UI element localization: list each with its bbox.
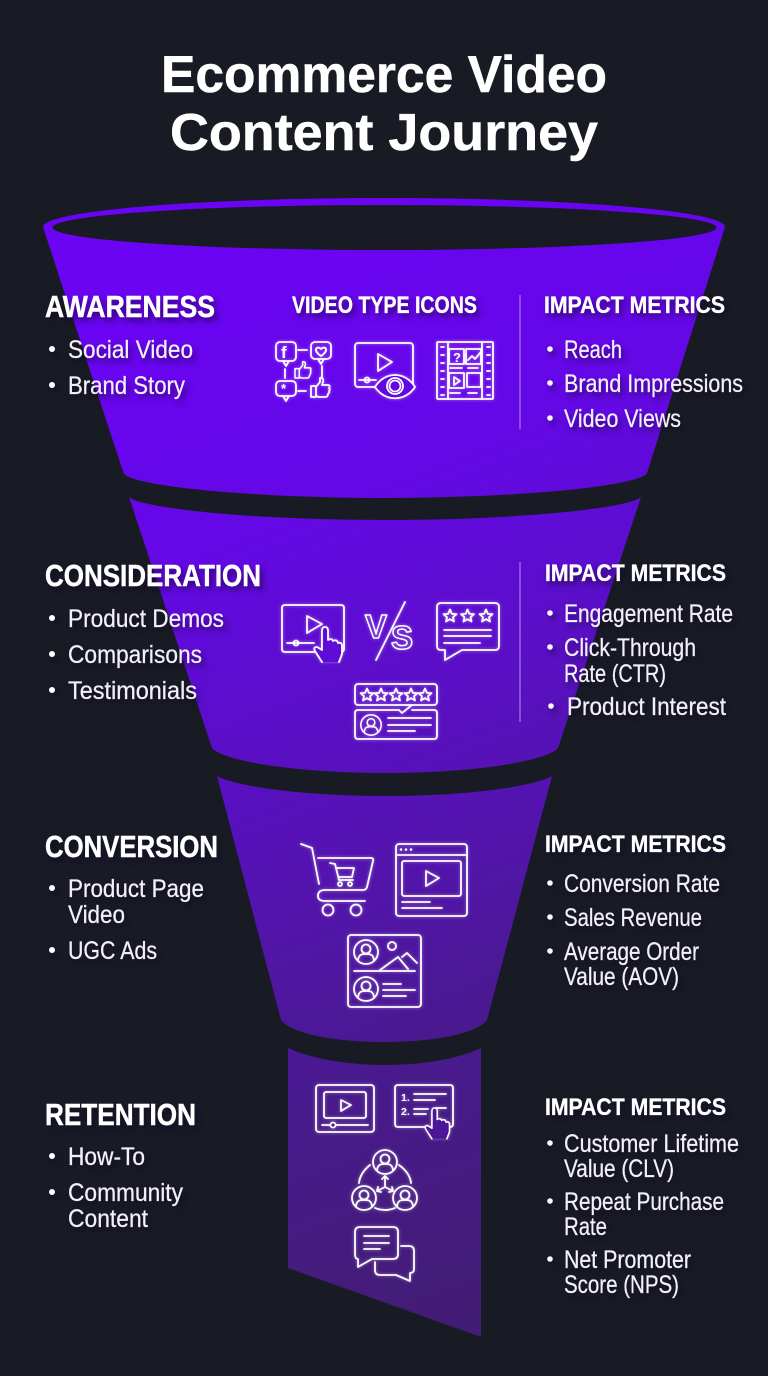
icon: rating card with profile (355, 684, 437, 739)
heading: impact metrics: IMPACT METRICS (545, 560, 726, 587)
list: retention metrics (547, 1130, 739, 1299)
icon: video with eye (355, 343, 415, 398)
funnel segment: awareness (43, 198, 725, 498)
list: consideration content types (49, 605, 224, 705)
heading: impact metrics: IMPACT METRICS (545, 1094, 726, 1121)
panel: consideration (45, 558, 733, 739)
icon: numbered steps with hand (395, 1085, 453, 1139)
list: conversion content types: Video (68, 901, 125, 929)
list: awareness metrics (547, 336, 743, 433)
icon: chat bubbles (355, 1227, 414, 1281)
heading: impact metrics: IMPACT METRICS (545, 831, 726, 858)
icon: versus: V (365, 608, 387, 645)
heading: awareness: AWARENESS (45, 289, 215, 324)
list: retention content types (49, 1143, 183, 1233)
list: conversion metrics: Sales Revenue (564, 904, 702, 932)
list: conversion content types: Product Page (68, 875, 204, 903)
icon: community network (352, 1150, 417, 1210)
icon: social media network: * (281, 381, 287, 396)
list: retention content types: How-To (68, 1143, 145, 1171)
list: consideration content types: Product Demos (68, 605, 224, 633)
list: retention metrics: Score (NPS) (564, 1271, 679, 1299)
icon: versus: S (391, 619, 413, 656)
list: retention metrics: Value (CLV) (564, 1155, 674, 1183)
heading: conversion: CONVERSION (45, 829, 218, 864)
list: retention content types: Content (68, 1205, 148, 1233)
list: consideration content types: Comparisons (68, 641, 202, 669)
funnel segment: retention (288, 1048, 481, 1337)
list: conversion metrics (547, 870, 720, 991)
list: conversion metrics: Average Order (564, 938, 699, 966)
panel: conversion (45, 829, 726, 1007)
list: consideration metrics: Rate (CTR) (564, 660, 666, 688)
list: consideration content types: Testimonials (68, 677, 197, 705)
list: retention metrics: Customer Lifetime (564, 1130, 739, 1158)
list: retention metrics: Rate (564, 1213, 607, 1241)
icon: video with pointing hand (282, 605, 344, 662)
divider: awareness (519, 295, 521, 429)
list: awareness metrics: Video Views (564, 405, 681, 433)
title: Content Journey (170, 104, 598, 162)
heading: consideration: CONSIDERATION (45, 558, 261, 593)
icon: user generated content card (348, 935, 421, 1007)
list: conversion metrics: Conversion Rate (564, 870, 720, 898)
list: retention metrics: Repeat Purchase (564, 1188, 724, 1216)
icon: versus (365, 602, 413, 660)
list: awareness content types: Brand Story (68, 372, 185, 400)
divider: consideration (519, 562, 521, 722)
icon: social media network (276, 342, 331, 401)
list: awareness content types (49, 336, 193, 400)
list: conversion content types: UGC Ads (68, 937, 157, 965)
panel: retention (45, 1085, 739, 1299)
icon: tutorial video (316, 1085, 374, 1132)
icon: video web page (396, 844, 467, 916)
heading: retention: RETENTION (45, 1097, 196, 1132)
list: awareness metrics: Reach (564, 336, 622, 364)
icon: numbered steps with hand: 2. (401, 1106, 410, 1118)
icon: shopping cart (301, 844, 373, 916)
icon: star review bubble (437, 603, 499, 660)
list: retention content types: Community (68, 1179, 183, 1207)
list: awareness metrics: Brand Impressions (564, 370, 743, 398)
icon: social media network: f (281, 343, 287, 362)
list: conversion content types (49, 875, 204, 965)
icon: film strip storyboard: ? (453, 350, 461, 365)
title: Ecommerce Video (161, 46, 607, 104)
panel: awareness (45, 289, 743, 433)
list: consideration metrics: Engagement Rate (564, 600, 733, 628)
list: retention metrics: Net Promoter (564, 1246, 691, 1274)
funnel segment: conversion (217, 776, 552, 1042)
title (161, 46, 607, 162)
list: consideration metrics (547, 600, 733, 721)
icon: film strip storyboard (437, 342, 493, 399)
icon: numbered steps with hand: 1. (401, 1092, 410, 1104)
heading: impact metrics: IMPACT METRICS (544, 292, 725, 319)
list: conversion metrics: Value (AOV) (564, 963, 679, 991)
heading: video type icons: VIDEO TYPE ICONS (292, 292, 477, 319)
list: consideration metrics: Product Interest (567, 693, 726, 721)
list: awareness content types: Social Video (68, 336, 193, 364)
list: consideration metrics: Click-Through (564, 634, 696, 662)
funnel segment: consideration (129, 497, 641, 773)
